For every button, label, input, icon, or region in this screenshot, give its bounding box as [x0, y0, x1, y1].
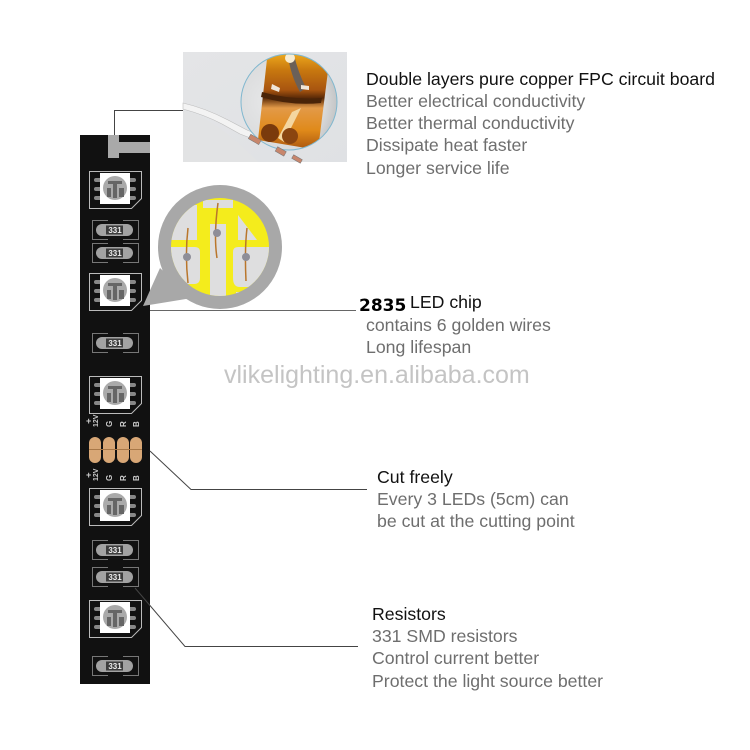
pad labels upper: + — [86, 416, 91, 426]
text: copper FPC — [366, 69, 715, 178]
LED segments — [248, 134, 302, 163]
text: cut freely: Cut freely — [377, 467, 453, 487]
resistor 5: 331 — [108, 573, 122, 582]
LED strip — [80, 135, 150, 684]
copper solder pads — [89, 437, 142, 463]
resistor 1: 331 — [108, 226, 122, 235]
text: cut freely: be cut at the cutting point — [377, 511, 575, 531]
pad labels upper: R — [119, 421, 128, 427]
pad labels upper: G — [105, 421, 114, 427]
copper corner mark — [108, 135, 150, 158]
resistor 2 — [92, 244, 138, 262]
LED 3 — [90, 376, 142, 414]
pad labels upper — [86, 414, 141, 427]
resistor 3 — [92, 334, 138, 352]
text: LED chip: contains 6 golden wires — [366, 315, 551, 335]
resistor 4: 331 — [108, 546, 122, 555]
pad labels upper: B — [132, 421, 141, 427]
chip magnifier — [143, 185, 282, 309]
magnifier circle — [241, 54, 337, 150]
pad labels upper: 12V — [93, 414, 100, 427]
text: cut freely — [377, 467, 575, 531]
text: copper FPC: Better electrical conductivity — [366, 91, 585, 111]
pad labels lower: 12V — [93, 468, 100, 481]
LED 5 — [90, 600, 142, 638]
text: LED chip: 2835 — [359, 296, 406, 316]
text: copper FPC: Double layers pure copper FPC circuit board — [366, 69, 715, 89]
text: resistors: Control current better — [372, 648, 539, 668]
FPC photo — [183, 50, 347, 163]
connector line: FPC — [114, 110, 183, 135]
text: cut freely: Every 3 LEDs (5cm) can — [377, 489, 569, 509]
pad labels lower — [86, 468, 141, 481]
connector line: resistors — [135, 588, 358, 646]
text: LED chip — [359, 292, 551, 357]
resistor 2: 331 — [108, 249, 122, 258]
pad labels lower: + — [86, 470, 91, 480]
resistor 6: 331 — [108, 662, 122, 671]
text: resistors — [372, 604, 603, 691]
pad labels lower: B — [132, 475, 141, 481]
text: copper FPC: Better thermal conductivity — [366, 113, 575, 133]
LED 4 — [90, 488, 142, 526]
connector line: LED chip — [150, 310, 356, 312]
resistor 6 — [92, 656, 138, 676]
text: resistors: Resistors — [372, 604, 446, 624]
watermark: vlikelighting.en.alibaba.com — [224, 361, 530, 389]
text: copper FPC: Dissipate heat faster — [366, 135, 527, 155]
resistor 1 — [92, 220, 138, 240]
resistor 5 — [92, 568, 138, 586]
connector line: cut point — [150, 451, 367, 490]
pad labels lower: R — [119, 475, 128, 481]
text: resistors: Protect the light source better — [372, 671, 603, 691]
text: resistors: 331 SMD resistors — [372, 626, 518, 646]
LED 2 — [90, 274, 142, 310]
text: LED chip: LED chip — [410, 292, 482, 312]
text: copper FPC: Longer service life — [366, 158, 510, 178]
cable — [183, 103, 262, 141]
resistor 3: 331 — [108, 339, 122, 348]
resistor 4 — [92, 540, 138, 560]
LED 1 — [90, 172, 142, 208]
text: LED chip: Long lifespan — [366, 337, 471, 357]
pad labels lower: G — [105, 475, 114, 481]
